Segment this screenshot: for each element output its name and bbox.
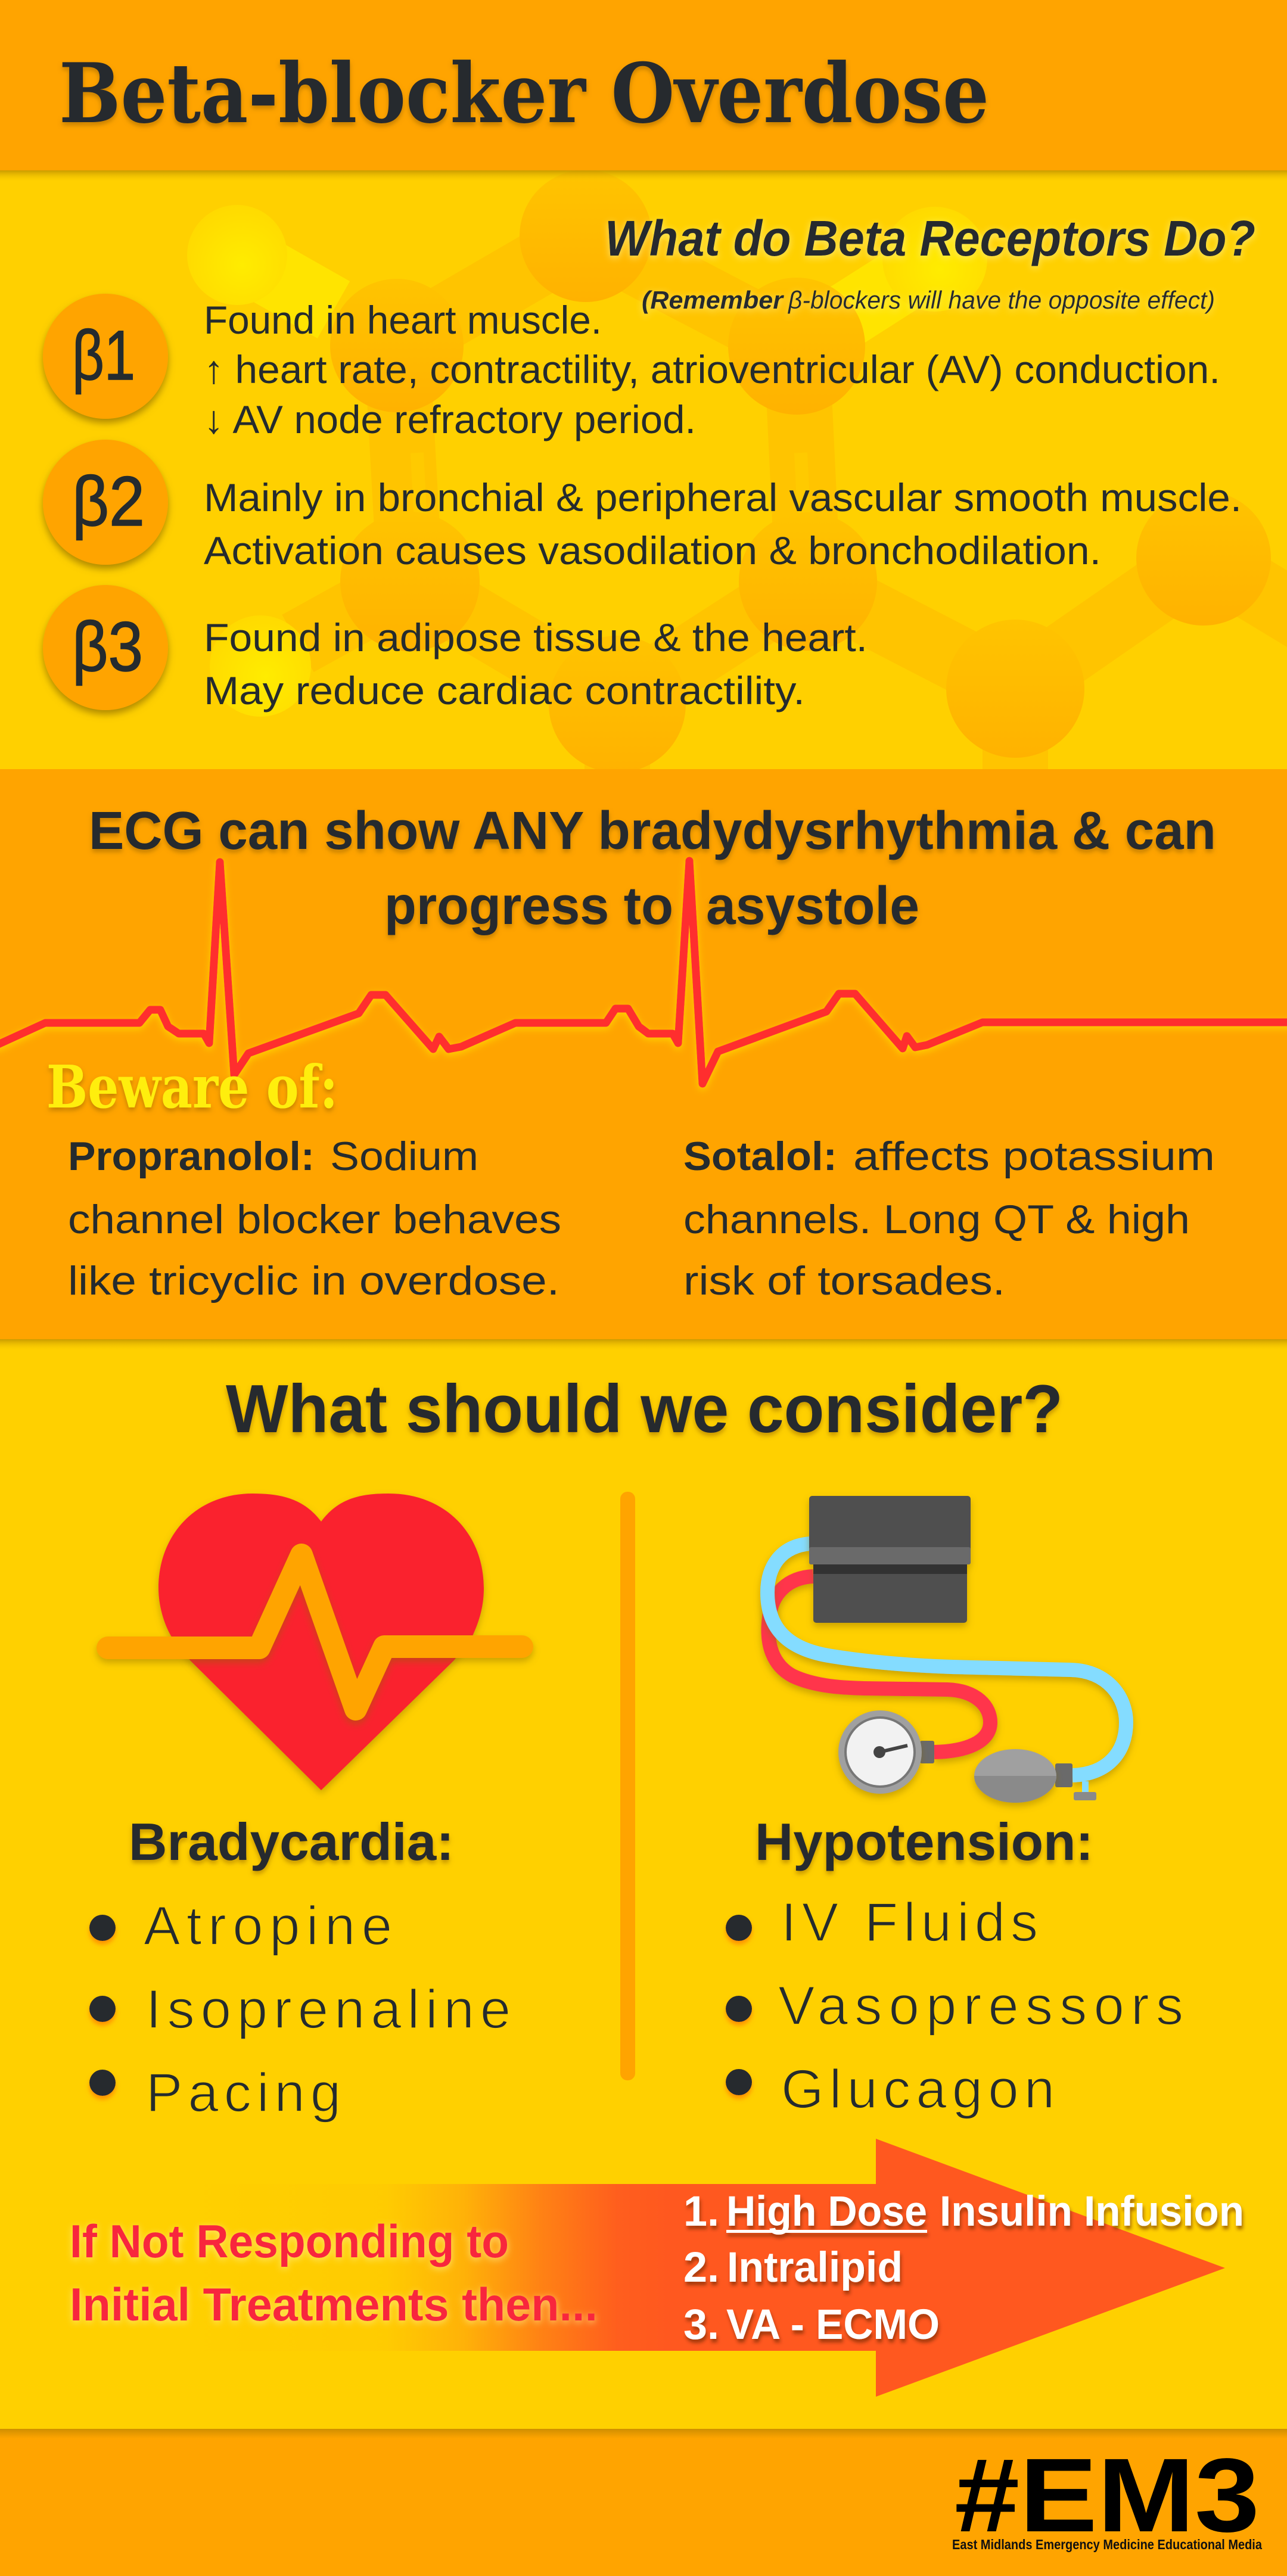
heading: ECG: ECG can show ANY bradydysrhythmia & can xyxy=(89,801,1216,861)
text: beta 2 description xyxy=(204,475,1242,573)
list: bradycardia treatments: Atropine xyxy=(144,1896,392,1956)
heading: ECG xyxy=(89,801,1216,936)
heading: ECG: asystole xyxy=(706,876,919,936)
text: if not responding xyxy=(70,2215,598,2331)
list: hypotension treatments xyxy=(726,1892,1183,2120)
list: escalation treatments: 3. xyxy=(683,2301,719,2348)
heading: what do beta receptors do: What do Beta Receptors Do? xyxy=(605,210,1255,266)
list: escalation treatments: VA - ECMO xyxy=(726,2301,940,2348)
heading: ECG: progress to xyxy=(384,876,673,936)
subheading: remember note: (Remember xyxy=(642,286,785,314)
text: if not responding: Initial Treatments then... xyxy=(70,2278,598,2331)
list: bradycardia treatments xyxy=(89,1896,511,2123)
list: escalation treatments xyxy=(683,2188,1244,2348)
title: Beta-blocker Overdose xyxy=(59,45,989,142)
subheading: remember note: β-blockers will have the opposite effect) xyxy=(787,286,1215,314)
list: hypotension treatments: IV Fluids xyxy=(781,1892,1038,1953)
divider xyxy=(620,1492,635,2080)
text: propranolol xyxy=(68,1134,561,1303)
list: escalation treatments: Insulin Infusion xyxy=(940,2188,1244,2235)
text: beta 3 description xyxy=(204,615,868,713)
text: propranolol: like tricyclic in overdose. xyxy=(68,1258,559,1303)
list: hypotension treatments: Vasopressors xyxy=(778,1975,1183,2036)
text: beta 2 description: Activation causes vasodilation & bronchodilation. xyxy=(204,528,1101,573)
badge: beta 2 xyxy=(43,440,168,565)
arrow xyxy=(179,2139,1225,2397)
footer band xyxy=(0,2429,1287,2576)
badge: beta 1: β1 xyxy=(72,316,135,395)
text: beta 1 description: Found in heart muscle. xyxy=(204,298,602,342)
text: propranolol: Propranolol: xyxy=(68,1134,315,1179)
text: beta 1 description xyxy=(204,298,1220,441)
text: propranolol: Sodium xyxy=(330,1134,478,1179)
text: sotalol xyxy=(683,1134,1215,1303)
list: hypotension treatments: Glucagon xyxy=(781,2059,1055,2120)
panel: ECG and beware xyxy=(0,769,1287,1351)
text: sotalol: affects potassium xyxy=(853,1134,1215,1179)
text: propranolol: channel blocker behaves xyxy=(68,1197,561,1242)
list: escalation treatments: 1. xyxy=(683,2188,719,2235)
text: sotalol: Sotalol: xyxy=(683,1134,837,1179)
text: beta 1 description: ↓ AV node refractory period. xyxy=(204,397,696,441)
chart: ECG trace xyxy=(0,861,1287,1084)
bulb xyxy=(974,1749,1096,1803)
text: sotalol: channels. Long QT & high xyxy=(683,1197,1190,1242)
badge: beta 3: β3 xyxy=(72,608,143,686)
header band xyxy=(0,0,1287,182)
heading: bradycardia: Bradycardia: xyxy=(129,1812,454,1871)
list: escalation treatments: High Dose xyxy=(726,2188,927,2235)
gauge xyxy=(838,1710,934,1794)
background: molecule xyxy=(187,170,1287,774)
text: beta 2 description: Mainly in bronchial & peripheral vascular smooth muscle. xyxy=(204,475,1242,519)
badge: beta 1 xyxy=(43,294,168,419)
list: bradycardia treatments: Pacing xyxy=(146,2062,341,2123)
badge: beta 3 xyxy=(43,585,168,710)
text: beta 3 description: Found in adipose tissue & the heart. xyxy=(204,615,868,659)
badge: beta 2: β2 xyxy=(72,462,145,541)
text: beta 3 description: May reduce cardiac contractility. xyxy=(204,668,805,713)
panel: beta 2 xyxy=(43,440,1242,573)
text: sotalol: risk of torsades. xyxy=(683,1258,1005,1303)
list: bradycardia treatments: Isoprenaline xyxy=(146,1979,511,2040)
text: beta 1 description: ↑ heart rate, contractility, atrioventricular (AV) conduction. xyxy=(204,347,1220,391)
text: if not responding: If Not Responding to xyxy=(70,2215,509,2267)
icon: blood pressure cuff xyxy=(767,1496,1126,1803)
panel: beta 1 xyxy=(43,294,1220,441)
list: escalation treatments: 2. xyxy=(683,2244,719,2291)
heading: what should we consider: What should we consider? xyxy=(226,1371,1063,1447)
heading: hypotension: Hypotension: xyxy=(755,1812,1093,1871)
logo: EM3: #EM3 xyxy=(955,2437,1260,2554)
panel: beta 3 xyxy=(43,585,868,713)
icon: heart with pulse xyxy=(108,1494,522,1790)
list: escalation treatments: Intralipid xyxy=(727,2244,903,2291)
heading: beware of: Beware of: xyxy=(46,1053,338,1122)
